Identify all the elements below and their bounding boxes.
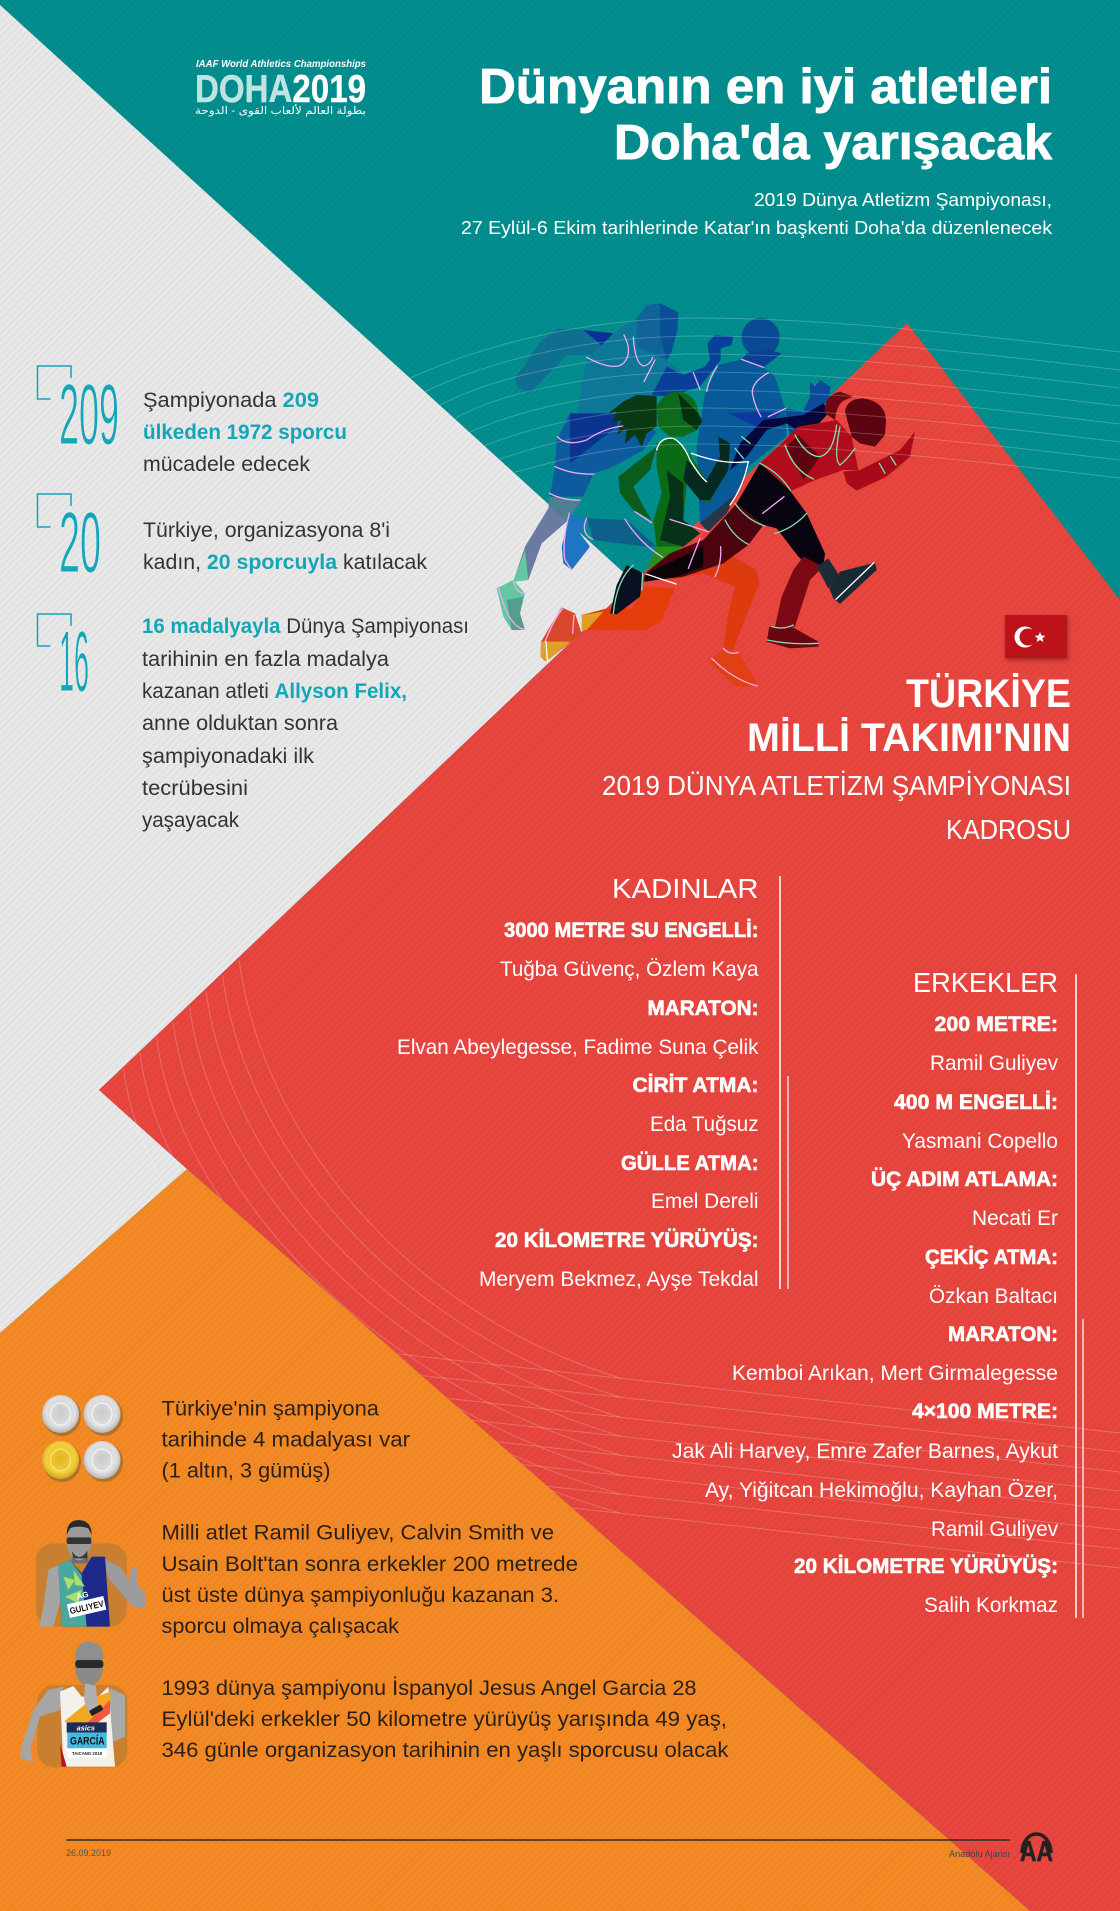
background: grey triangle xyxy=(0,5,634,1333)
list: men's team: 4×100 METRE: xyxy=(912,1400,1058,1423)
list: men's team: ERKEKLER xyxy=(913,967,1058,998)
stat: 16 medals: şampiyonadaki ilk xyxy=(142,745,315,768)
photo illustration: Jesus Angel Garcia: TAICANG 2018 xyxy=(72,1751,102,1757)
stat: 209 countries xyxy=(38,366,347,476)
running track lines across upper area xyxy=(410,318,1120,478)
runner: red female xyxy=(610,392,915,648)
text: Garcia note: Eylül'deki erkekler 50 kilometre yürüyüş yarışında 49 yaş, xyxy=(162,1708,727,1731)
text: Guliyev note xyxy=(162,1522,578,1638)
footer: date and rule: Anadolu Ajansı xyxy=(949,1849,1010,1860)
list: men's team: Ay, Yiğitcan Hekimoğlu, Kayhan Özer, xyxy=(705,1479,1058,1502)
list: men's team: Kemboi Arıkan, Mert Girmalegesse xyxy=(732,1362,1058,1385)
photo illustration: Ramil Guliyev: GULIYEV xyxy=(69,1599,105,1616)
list: men's team: Ramil Guliyev xyxy=(930,1052,1058,1075)
runner: back right male xyxy=(697,318,831,532)
photo illustration: Jesus Angel Garcia xyxy=(20,1642,127,1767)
heading: Türkiye squad: MİLLİ TAKIMI'NIN xyxy=(747,716,1071,760)
text: Guliyev note: sporcu olmaya çalışacak xyxy=(162,1615,400,1638)
title xyxy=(479,60,1053,170)
list: men's team: Salih Korkmaz xyxy=(924,1594,1058,1617)
list: women's team: GÜLLE ATMA: xyxy=(621,1152,758,1175)
text: medal count: tarihinde 4 madalyası var xyxy=(162,1428,410,1452)
list: men's team: Ramil Guliyev xyxy=(931,1518,1058,1541)
logo: IAAF Doha 2019: DOHA2019 xyxy=(195,68,366,111)
heading: Türkiye squad xyxy=(602,671,1071,845)
photo illustration: Ramil Guliyev: AG xyxy=(76,1590,89,1601)
list: women's team: Tuğba Güvenç, Özlem Kaya xyxy=(500,958,759,981)
stat: 16 medals: 16 xyxy=(59,614,89,710)
footer: date and rule: 26.09.2019 xyxy=(66,1848,111,1858)
list: men's team: Özkan Baltacı xyxy=(929,1285,1058,1308)
list: men's team xyxy=(672,967,1083,1618)
stat: 20 athletes: 20 xyxy=(59,495,101,591)
heading: Türkiye squad: KADROSU xyxy=(946,814,1071,845)
list: men's team: 400 M ENGELLİ: xyxy=(894,1091,1058,1114)
runner: back left male xyxy=(497,303,733,630)
list: women's team: CİRİT ATMA: xyxy=(632,1074,758,1097)
stat: 20 athletes xyxy=(38,494,427,591)
photo illustration: Ramil Guliyev xyxy=(36,1520,146,1627)
text: Guliyev note: Milli atlet Ramil Guliyev, Calvin Smith ve xyxy=(162,1522,554,1544)
list: women's team: Eda Tuğsuz xyxy=(650,1113,758,1136)
text: Guliyev note: üst üste dünya şampiyonluğu kazanan 3. xyxy=(162,1584,559,1607)
icon: Turkish flag xyxy=(1005,615,1067,658)
text: Garcia note: 1993 dünya şampiyonu İspanyol Jesus Angel Garcia 28 xyxy=(162,1677,696,1700)
icon: Anadolu Agency logo: AA xyxy=(1020,1836,1053,1868)
list: women's team: 3000 METRE SU ENGELLİ: xyxy=(504,919,758,942)
list: women's team: Elvan Abeylegesse, Fadime Suna Çelik xyxy=(397,1036,759,1059)
list: men's team: Necati Er xyxy=(972,1207,1058,1230)
text: Garcia note xyxy=(162,1677,729,1762)
footer: date and rule xyxy=(66,1840,1010,1860)
stat: 20 athletes: Türkiye, organizasyona 8'i xyxy=(143,519,390,542)
runner kit outlines xyxy=(498,335,896,686)
logo: IAAF Doha 2019: بطولة العالم لألعاب القوى - الدوحة xyxy=(195,104,366,117)
list: women's team: MARATON: xyxy=(648,997,758,1020)
list: women's team: Emel Dereli xyxy=(651,1190,758,1213)
list: women's team xyxy=(397,873,788,1291)
illustration: four runners xyxy=(497,303,915,687)
background: orange panel xyxy=(0,1169,1030,1911)
text: medal count: Türkiye'nin şampiyona xyxy=(162,1398,379,1420)
text: Guliyev note: Usain Bolt'tan sonra erkekler 200 metrede xyxy=(162,1553,578,1576)
stat: 16 medals: kazanan atleti Allyson Felix, xyxy=(142,680,407,703)
stat: 20 athletes: kadın, 20 sporcuyla katılacak xyxy=(143,551,427,574)
title: Dünyanın en iyi atletleri xyxy=(479,60,1052,114)
list: women's team: KADINLAR xyxy=(612,873,758,904)
title: Doha'da yarışacak xyxy=(614,116,1053,170)
stat: 16 medals xyxy=(38,614,469,832)
list: men's team: ÜÇ ADIM ATLAMA: xyxy=(871,1168,1058,1191)
list: men's team: MARATON: xyxy=(948,1323,1058,1346)
icon: four medals xyxy=(42,1395,123,1482)
list: women's team: Meryem Bekmez, Ayşe Tekdal xyxy=(479,1268,758,1291)
stat: 16 medals: 16 madalyayla Dünya Şampiyonası xyxy=(142,615,469,638)
stat: 16 medals: yaşayacak xyxy=(142,809,239,832)
stat: 16 medals: tarihinin en fazla madalya xyxy=(142,648,389,671)
background: red panel xyxy=(99,323,1120,1911)
running track lines on red panel xyxy=(124,960,1120,1568)
subtitle: 27 Eylül-6 Ekim tarihlerinde Katar'ın başkenti Doha'da düzenlenecek xyxy=(461,218,1053,238)
list: men's team: Jak Ali Harvey, Emre Zafer Barnes, Aykut xyxy=(672,1440,1058,1463)
stat: 209 countries: ülkeden 1972 sporcu xyxy=(143,421,347,444)
stat: 16 medals: anne olduktan sonra xyxy=(142,712,338,735)
text: medal count: (1 altın, 3 gümüş) xyxy=(162,1460,330,1482)
stat: 16 medals: tecrübesini xyxy=(142,777,248,800)
list: women's team: 20 KİLOMETRE YÜRÜYÜŞ: xyxy=(495,1229,758,1252)
stat: 209 countries: mücadele edecek xyxy=(143,453,311,476)
list: men's team: ÇEKİÇ ATMA: xyxy=(925,1246,1058,1269)
list: men's team: 200 METRE: xyxy=(934,1013,1058,1036)
subtitle: 2019 Dünya Atletizm Şampiyonası, xyxy=(754,190,1052,210)
text: Garcia note: 346 günle organizasyon tarihinin en yaşlı sporcusu olacak xyxy=(162,1739,729,1762)
logo: IAAF Doha 2019: IAAF World Athletics Championships xyxy=(196,59,366,70)
subtitle xyxy=(461,190,1053,238)
runner: green female xyxy=(541,392,759,687)
text: medal count xyxy=(162,1398,410,1482)
heading: Türkiye squad: TÜRKİYE xyxy=(906,671,1071,716)
stat: 209 countries: Şampiyonada 209 xyxy=(143,389,319,412)
stat: 209 countries: 209 xyxy=(59,367,119,463)
list: men's team: Yasmani Copello xyxy=(902,1130,1058,1153)
photo illustration: Jesus Angel Garcia: asics xyxy=(77,1724,95,1733)
list: men's team: 20 KİLOMETRE YÜRÜYÜŞ: xyxy=(794,1555,1058,1578)
heading: Türkiye squad: 2019 DÜNYA ATLETİZM ŞAMPİYONASI xyxy=(602,770,1071,801)
photo illustration: Jesus Angel Garcia: GARCÍA xyxy=(70,1735,105,1748)
